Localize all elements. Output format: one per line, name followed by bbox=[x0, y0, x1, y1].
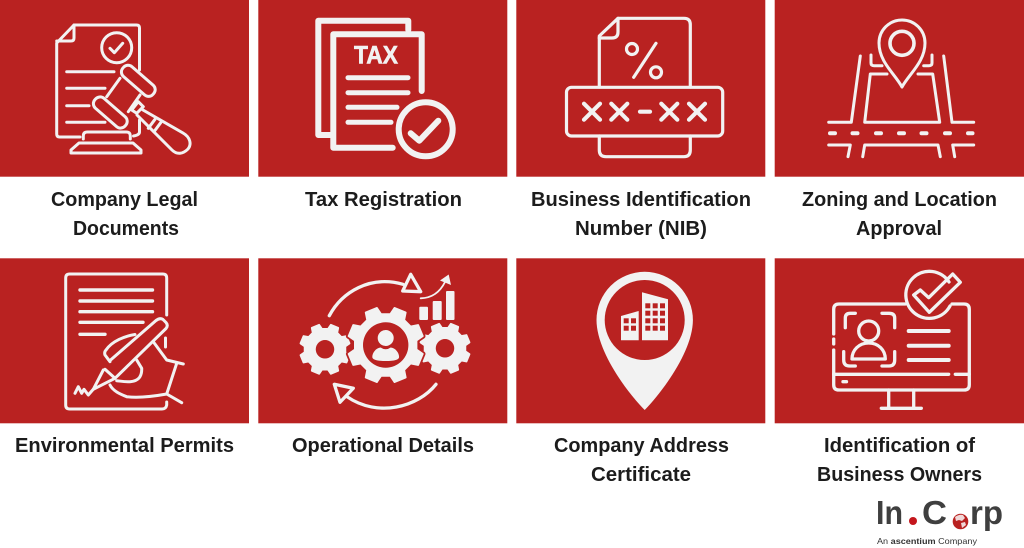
heading: environmental permits: Environmental Permits bbox=[15, 435, 234, 457]
logo dot bbox=[909, 517, 917, 525]
panel: tax registration bbox=[258, 0, 507, 177]
panel: zoning and location approval bbox=[775, 0, 1024, 177]
heading: business identification number bbox=[531, 189, 751, 240]
heading: company legal documents: Company Legal bbox=[51, 189, 198, 211]
panel: company address certificate bbox=[516, 258, 765, 423]
panel: operational details bbox=[258, 258, 507, 423]
right gear bbox=[421, 324, 469, 373]
heading: operational details: Operational Details bbox=[292, 435, 474, 457]
logo: InCorp: rp bbox=[970, 494, 1003, 531]
logo globe bbox=[953, 514, 968, 529]
heading: company address certificate bbox=[554, 435, 729, 486]
heading: business identification number: Number (NIB) bbox=[575, 218, 707, 240]
panel: company legal documents bbox=[0, 0, 249, 177]
logo: InCorp: C bbox=[922, 494, 947, 531]
heading: identification of business owners: Identification of bbox=[824, 435, 975, 457]
center gear bbox=[349, 308, 423, 382]
logo: InCorp: In bbox=[876, 494, 903, 531]
icon: document with gavel bbox=[57, 25, 190, 153]
logo: InCorp bbox=[876, 494, 1003, 546]
heading: company legal documents bbox=[51, 189, 198, 240]
left gear bbox=[301, 325, 349, 374]
heading: tax registration: Tax Registration bbox=[305, 189, 462, 211]
heading: company address certificate: Certificate bbox=[591, 464, 691, 486]
heading: company address certificate: Company Address bbox=[554, 435, 729, 457]
heading: business identification number: Business Identification bbox=[531, 189, 751, 211]
heading: zoning and location approval: Approval bbox=[856, 218, 942, 240]
heading: identification of business owners: Business Owners bbox=[817, 464, 982, 486]
panel: business identification number bbox=[516, 0, 765, 177]
icon: tax documents with check: TAX bbox=[354, 41, 398, 69]
heading: zoning and location approval: Zoning and Location bbox=[802, 189, 997, 211]
icon: building in map pin bbox=[596, 272, 693, 410]
icon: tax documents with check bbox=[318, 21, 453, 156]
icon: gears with person and arrows bbox=[301, 274, 469, 408]
logo: InCorp: An ascentium Company bbox=[877, 536, 978, 546]
heading: identification of business owners bbox=[817, 435, 982, 486]
icon: document with number plate bbox=[566, 18, 723, 157]
icon: map pin over road bbox=[829, 20, 974, 157]
panel: environmental permits bbox=[0, 258, 249, 423]
heading: zoning and location approval bbox=[802, 189, 997, 240]
panel: identification of business owners bbox=[775, 258, 1024, 423]
heading: company legal documents: Documents bbox=[73, 218, 179, 240]
icon: monitor with profile and check bbox=[834, 271, 969, 408]
icon: hand signing document bbox=[66, 274, 183, 409]
